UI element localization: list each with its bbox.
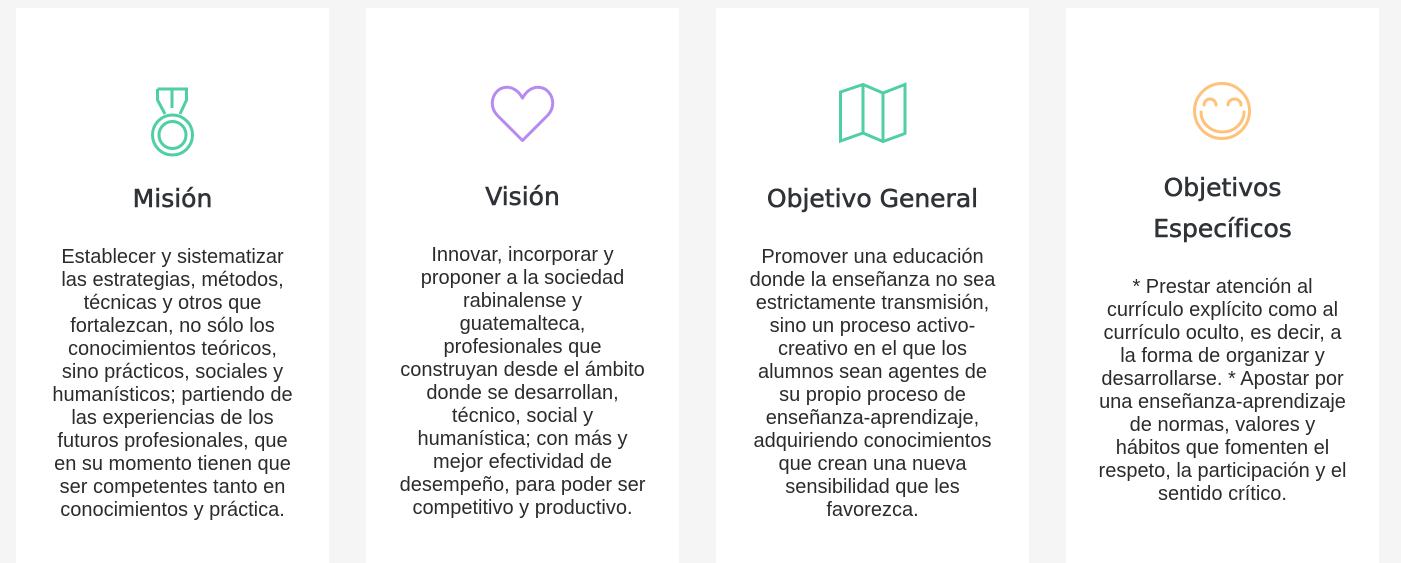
text: Objetivo General: su propio proceso de <box>779 384 966 406</box>
icon: medal <box>151 88 194 156</box>
text: Visión: rabinalense y <box>463 290 582 312</box>
text: Objetivo General <box>750 246 996 521</box>
panel: Objetivos Específicos <box>1066 8 1379 563</box>
text: Visión: proponer a la sociedad <box>421 267 624 289</box>
text: Objetivos Específicos: currículo explícito como al <box>1107 299 1338 321</box>
text: Objetivo General: donde la enseñanza no sea <box>750 269 995 291</box>
heading: Objetivo General: Objetivo General <box>767 184 978 213</box>
text: Misión: fortalezcan, no sólo los <box>70 315 275 337</box>
text: Visión: profesionales que <box>444 336 601 358</box>
text: Misión: conocimientos y práctica. <box>60 499 285 521</box>
text: Misión: ser competentes tanto en <box>60 476 285 498</box>
text: Misión: las estrategias, métodos, <box>61 269 284 291</box>
text: Misión: en su momento tienen que <box>54 453 291 475</box>
text: Misión: sino prácticos, sociales y <box>62 361 283 383</box>
text: Objetivo General: enseñanza-aprendizaje, <box>766 407 979 429</box>
panel: Visión <box>366 8 679 563</box>
heading: Objetivos Específicos: Específicos <box>1153 214 1292 243</box>
text: Misión: técnicas y otros que <box>84 292 261 314</box>
text: Objetivo General: favorezca. <box>826 499 919 521</box>
text: Objetivos Específicos: sentido crítico. <box>1158 483 1287 505</box>
text: Objetivo General: adquiriendo conocimientos <box>754 430 991 452</box>
text: Objetivo General: estrictamente transmisión, <box>756 292 989 314</box>
text: Visión: mejor efectividad de <box>433 451 612 473</box>
text: Visión: Innovar, incorporar y <box>431 244 614 266</box>
text: Objetivo General: que crean una nueva <box>779 453 966 475</box>
text: Objetivo General: sensibilidad que les <box>785 476 960 498</box>
text: Misión: las experiencias de los <box>71 407 274 429</box>
heading: Misión: Misión <box>133 184 212 213</box>
text: Visión: donde se desarrollan, <box>426 382 619 404</box>
text: Objetivo General: alumnos sean agentes de <box>758 361 987 383</box>
panel: Misión <box>16 8 329 563</box>
heading: Objetivos Específicos: Objetivos <box>1164 173 1281 202</box>
text: Visión: técnico, social y <box>452 405 593 427</box>
text: Objetivo General: sino un proceso activo- <box>770 315 975 337</box>
text: Visión: construyan desde el ámbito <box>400 359 645 381</box>
text: Misión: Establecer y sistematizar <box>61 246 284 268</box>
text: Misión: conocimientos teóricos, <box>68 338 277 360</box>
text: Objetivos Específicos: la forma de organizar y <box>1120 345 1325 367</box>
text: Visión: humanística; con más y <box>417 428 628 450</box>
text: Objetivos Específicos: * Prestar atención al <box>1132 276 1313 298</box>
text: Objetivo General: Promover una educación <box>761 246 984 268</box>
text: Objetivos Específicos <box>1099 276 1346 505</box>
text: Misión: humanísticos; partiendo de <box>52 384 293 406</box>
text: Misión <box>52 246 293 521</box>
heading: Objetivos Específicos <box>1153 173 1292 243</box>
text: Objetivos Específicos: respeto, la participación y el <box>1099 460 1346 482</box>
text: Visión: competitivo y productivo. <box>412 497 633 519</box>
text: Visión <box>400 244 646 519</box>
text: Objetivos Específicos: desarrollarse. * Apostar por <box>1101 368 1344 390</box>
text: Objetivos Específicos: una enseñanza-aprendizaje <box>1099 391 1346 413</box>
text: Objetivos Específicos: currículo oculto, es decir, a <box>1104 322 1341 344</box>
panel: Objetivo General <box>716 8 1029 563</box>
text: Objetivos Específicos: de normas, valores y <box>1130 414 1315 436</box>
text: Visión: guatemalteca, <box>460 313 585 335</box>
icon: map <box>839 82 906 144</box>
text: Objetivo General: creativo en el que los <box>778 338 967 360</box>
text: Objetivos Específicos: hábitos que fomenten el <box>1116 437 1329 459</box>
text: Visión: desempeño, para poder ser <box>400 474 645 496</box>
heading: Visión: Visión <box>485 182 560 211</box>
icon: smiley <box>1193 82 1251 140</box>
icon: heart <box>490 86 554 142</box>
text: Misión: futuros profesionales, que <box>57 430 288 452</box>
